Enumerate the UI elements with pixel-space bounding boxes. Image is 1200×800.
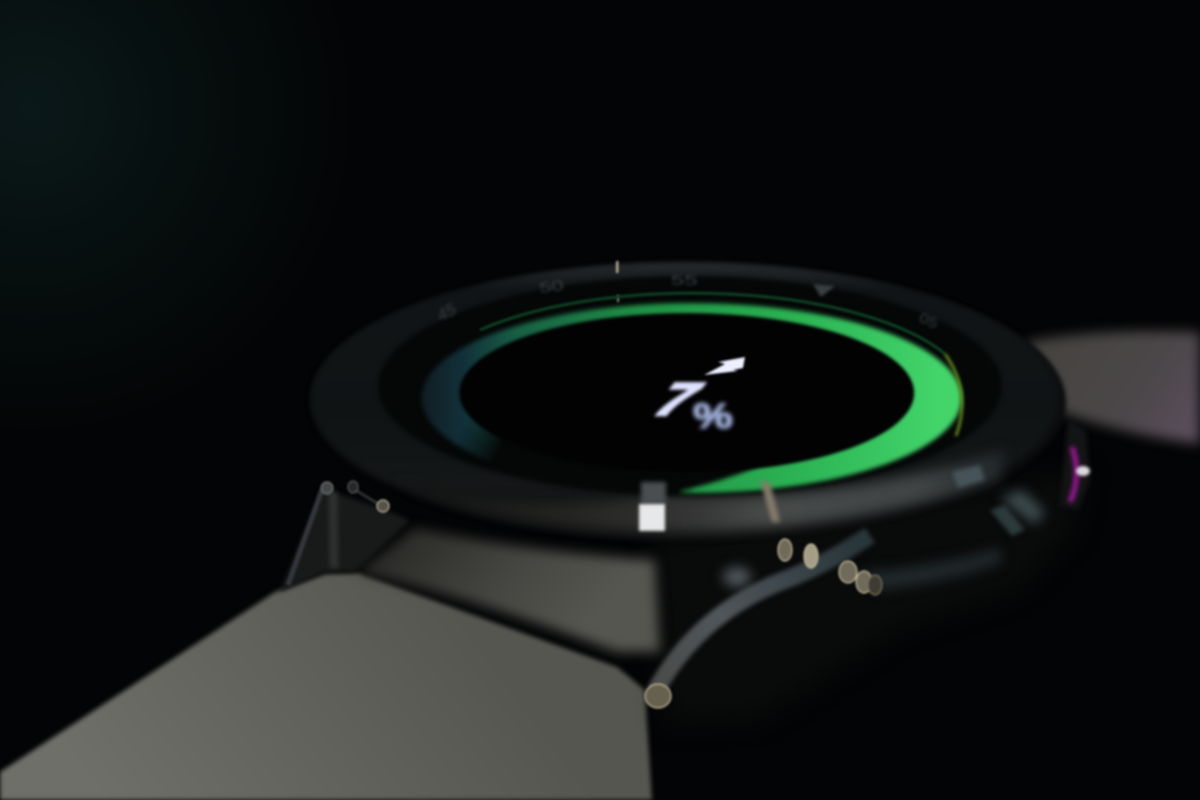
- watch bezel: [310, 262, 1066, 540]
- digit 7: 7: [640, 373, 715, 425]
- icon: charging bolt: [704, 357, 745, 375]
- watch screen: black centre: [460, 314, 914, 472]
- rim glow: right yellow-green: [945, 354, 962, 436]
- bokeh light spots: [321, 481, 882, 708]
- lug: right curved: [655, 535, 870, 692]
- bezel scale numbers: 55: [671, 273, 698, 289]
- watch case: polished lug side: [358, 528, 660, 652]
- highlight: bezel reflection: [639, 465, 985, 531]
- crown: side button: [1060, 420, 1090, 510]
- bezel scale numbers: 50: [538, 277, 565, 296]
- watch case: lower right body: [650, 470, 1085, 725]
- top highlight glint: [616, 261, 619, 302]
- highlight: lug reflection: [723, 567, 751, 587]
- charging ring: green arc: [422, 303, 962, 493]
- strap: left band: [0, 573, 652, 800]
- lug: left: [280, 488, 410, 592]
- strap: right band: [1025, 331, 1200, 444]
- watch dial: outer dark ring: [378, 276, 1002, 496]
- bezel scale numbers: [435, 273, 940, 332]
- bezel scale numbers: 45: [435, 298, 458, 326]
- bezel triangle marker: [813, 284, 835, 297]
- battery readout: 7 percent: [640, 357, 745, 436]
- percent sign: %: [693, 397, 733, 436]
- thin green rim line: [480, 293, 945, 354]
- bezel scale numbers: 05: [917, 310, 940, 332]
